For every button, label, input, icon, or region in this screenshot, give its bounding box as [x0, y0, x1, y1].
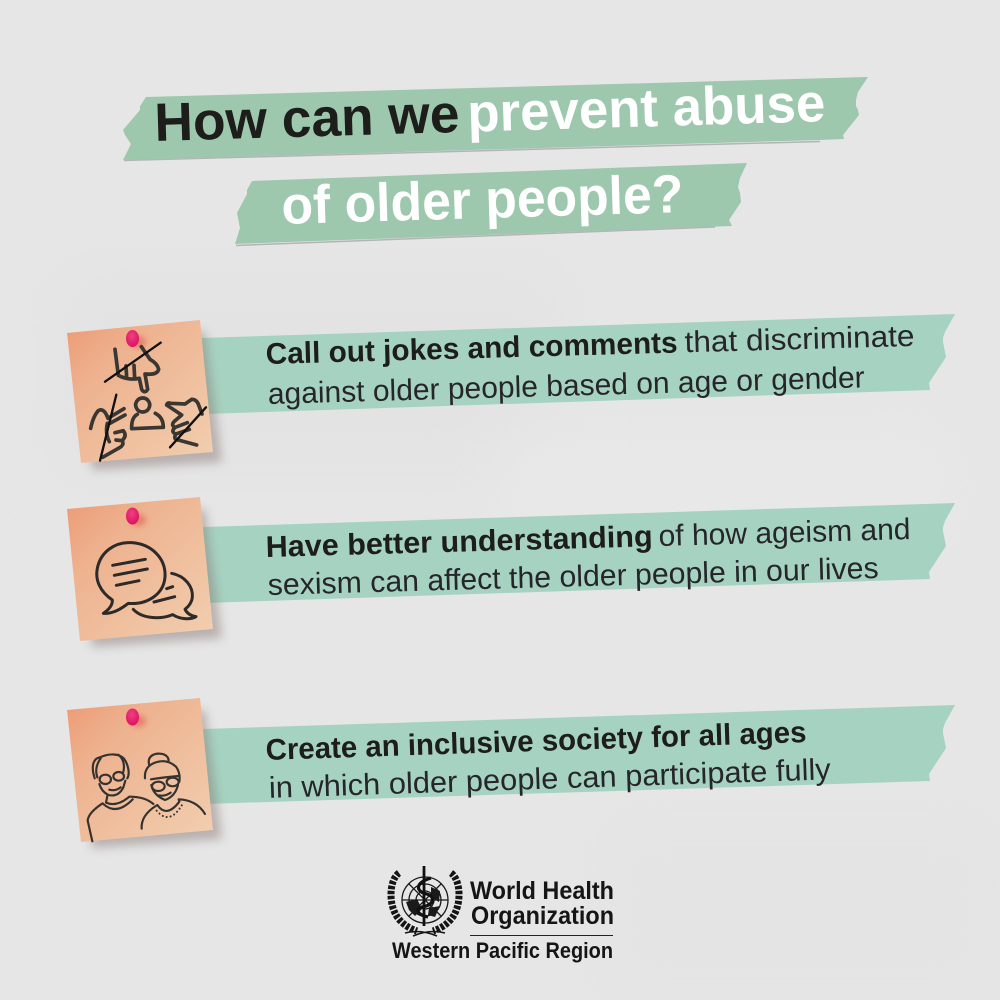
sticky note [67, 698, 213, 842]
icon: WHO emblem [391, 866, 459, 936]
sticky note [67, 497, 213, 641]
icon: speech bubbles [97, 543, 196, 619]
title text: first line: How can we [154, 84, 460, 153]
banner text: call out jokes [265, 320, 916, 411]
small bubble [133, 573, 196, 619]
logo: World Health Organization Western Pacific Region [391, 866, 614, 963]
pin [126, 708, 146, 727]
panel: call out jokes [67, 314, 955, 470]
title text: first line [154, 73, 826, 153]
banner text: better understanding: of how ageism and [658, 513, 911, 553]
pin [126, 508, 146, 526]
title tape: second line [235, 163, 747, 246]
banner text: inclusive society: Create an inclusive society for all ages [265, 716, 807, 767]
logo text: Organization: Organization [471, 902, 614, 930]
person [132, 398, 163, 429]
banner text: better understanding [265, 513, 912, 602]
panel: better understanding [67, 497, 955, 647]
left hand [91, 409, 125, 457]
strike: top [105, 343, 161, 382]
banner text: inclusive society: in which older people can participate fully [268, 753, 831, 805]
icon: older couple [88, 754, 205, 841]
banner text: better understanding: sexism can affect the older people in our lives [267, 552, 879, 602]
sticky note shadow [82, 710, 222, 848]
banner text: call out jokes: that discriminate [684, 320, 915, 359]
top hand [115, 347, 159, 392]
staff and serpent [423, 866, 425, 926]
strike: left [100, 395, 116, 461]
older man [93, 754, 129, 778]
banner text: better understanding: Have better understanding [265, 520, 653, 564]
banner text: inclusive society [265, 715, 831, 805]
banner: call out jokes [200, 314, 955, 414]
title tape: first line [123, 77, 868, 160]
logo text: Western Pacific Region: Western Pacific Region [392, 938, 613, 963]
sticky note [67, 320, 213, 463]
large bubble [97, 543, 165, 613]
banner text: call out jokes: Call out jokes and comments [265, 327, 678, 371]
right hand [167, 399, 202, 445]
logo rule [470, 935, 613, 936]
title [123, 73, 868, 245]
strike: right [170, 407, 206, 447]
icon: crossed-out pointing hands around a person [91, 343, 206, 461]
older woman [145, 754, 180, 782]
logo text: World Health: World Health [470, 877, 614, 905]
sticky note shadow [82, 332, 222, 470]
sticky note shadow [82, 509, 222, 647]
pin [126, 330, 146, 348]
panel: inclusive society [67, 698, 955, 848]
globe [402, 877, 448, 923]
title text: second line: of older people? [281, 164, 684, 236]
banner: inclusive society [203, 705, 955, 804]
title text: first line: prevent abuse [466, 73, 826, 144]
land masses [406, 887, 440, 917]
banner text: call out jokes: against older people based on age or gender [267, 361, 865, 411]
wreath [391, 873, 459, 936]
banner: better understanding [203, 503, 955, 603]
